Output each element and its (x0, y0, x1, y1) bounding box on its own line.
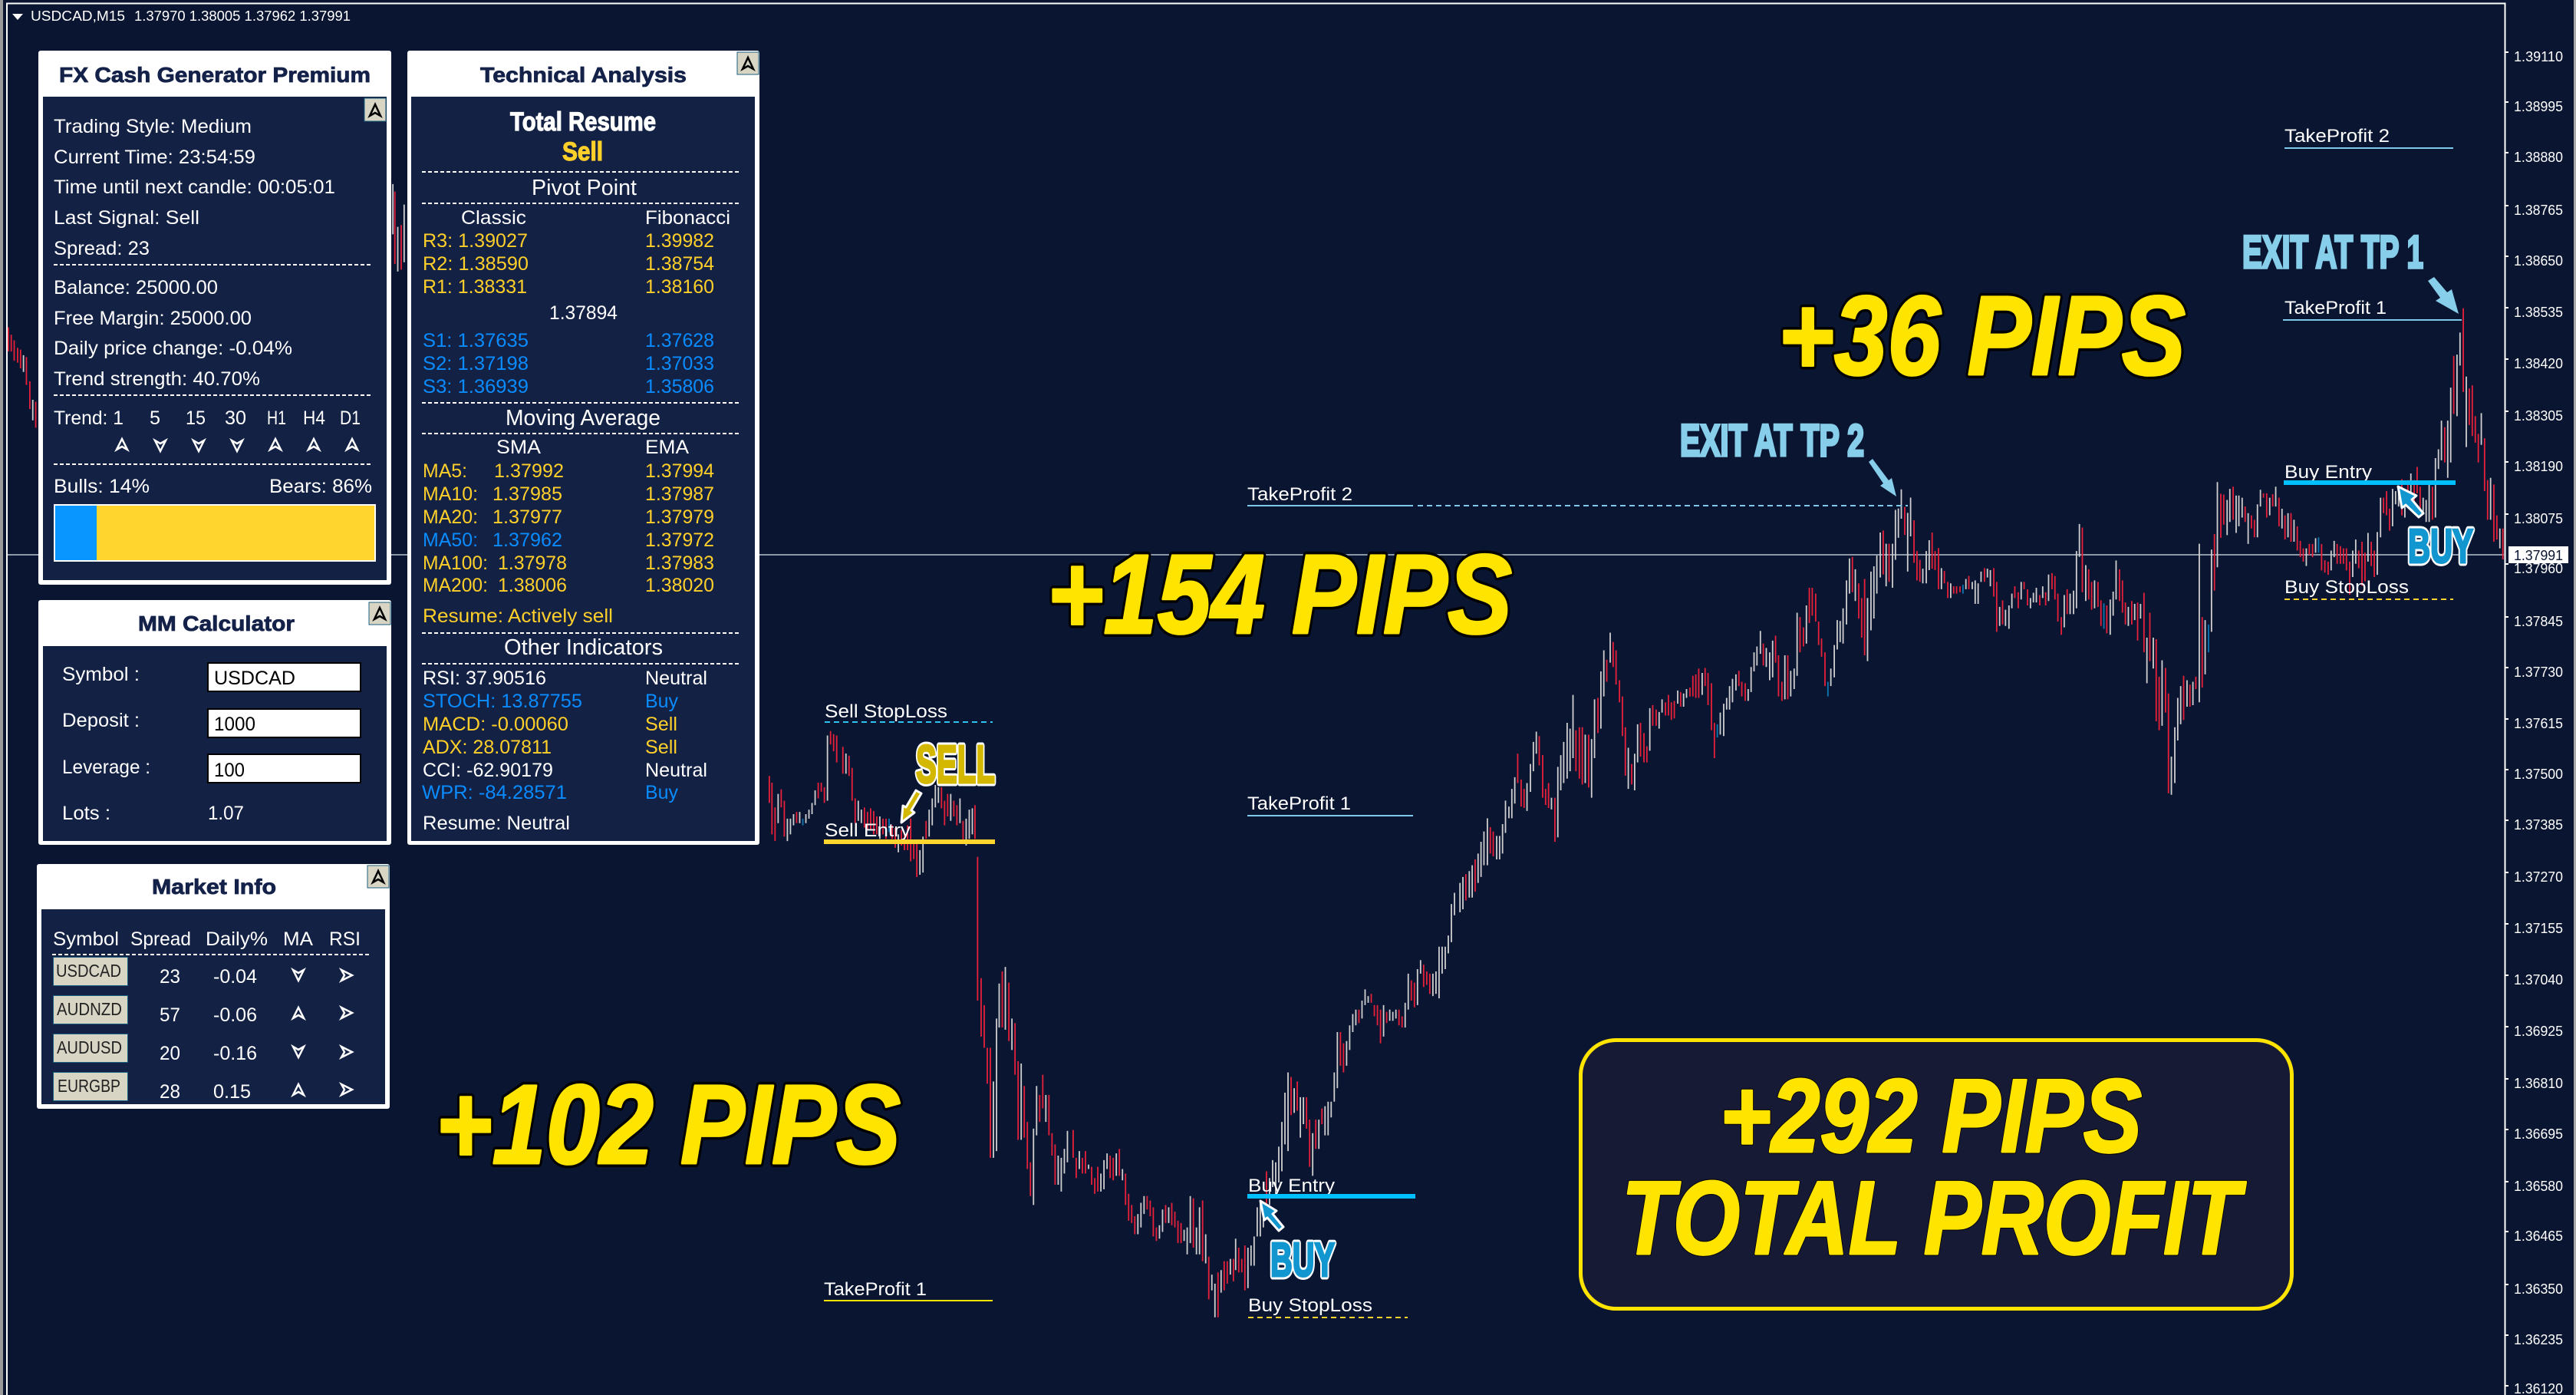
total profit callout: TOTAL PROFIT (1622, 1159, 2246, 1276)
moving average table: 1.38006 (498, 575, 567, 596)
collapse button (367, 866, 389, 888)
market table rows: 20 (160, 1043, 180, 1064)
calculator fields: 100 (214, 760, 245, 781)
+36 pips heading: +36 PIPS (1778, 273, 2186, 399)
market table rows: 23 (160, 966, 180, 988)
current price tag: 1.37991 (2514, 548, 2563, 563)
moving average table: MA100: (423, 552, 488, 574)
account info text: Free Margin: 25000.00 (54, 308, 252, 329)
price axis: 1.37500 (2514, 767, 2563, 782)
account info text (54, 116, 372, 395)
price axis: 1.38420 (2514, 356, 2563, 371)
other indicators table: CCI: -62.90179 (423, 760, 553, 781)
price axis: 1.36465 (2514, 1228, 2563, 1244)
price axis: 1.38995 (2514, 99, 2563, 114)
moving average table: 1.37978 (498, 552, 567, 574)
market table rows: 57 (160, 1004, 180, 1026)
other indicators table: Sell (645, 714, 677, 735)
price axis: 1.37845 (2514, 614, 2563, 629)
account info text: Trading Style: Medium (54, 116, 252, 137)
other indicators table: MACD: -0.00060 (423, 714, 568, 735)
pivot point table: 1.37894 (549, 302, 618, 324)
sell trade levels: Sell StopLoss (825, 701, 947, 722)
pivot point table: Classic (461, 207, 526, 229)
current price line (8, 554, 2505, 556)
calculator fields: Lots : (62, 803, 110, 824)
price axis: 1.36580 (2514, 1179, 2563, 1194)
chart header (12, 8, 351, 24)
price axis: 1.38535 (2514, 305, 2563, 320)
moving average table (423, 406, 714, 627)
price axis: 1.37155 (2514, 921, 2563, 936)
sell arrow (901, 790, 921, 823)
account info text: Trend strength: 40.70% (54, 368, 260, 390)
trend row: H1 (267, 407, 286, 429)
price axis: 1.36925 (2514, 1024, 2563, 1039)
panel title: Market Info (152, 875, 276, 899)
second buy trade levels: TakeProfit 1 (2284, 298, 2387, 318)
market table rows: -0.16 (213, 1043, 257, 1064)
first buy signal label: BUY (1270, 1234, 1335, 1287)
trend row: D1 (340, 407, 361, 429)
+102 pips heading: +102 PIPS (436, 1062, 901, 1188)
second buy signal label (2408, 520, 2473, 573)
sell signal label (916, 734, 995, 794)
moving average table: 1.38020 (645, 575, 714, 596)
total profit callout (1580, 1040, 2292, 1309)
pivot point table: R1: 1.38331 (423, 276, 527, 298)
panel: Technical Analysis (407, 51, 759, 845)
price axis: 1.36810 (2514, 1076, 2563, 1091)
second buy trade levels: TakeProfit 2 (2284, 126, 2390, 147)
total resume (510, 107, 656, 167)
sell trade levels: Sell Entry (825, 820, 911, 841)
pivot point table: 1.37628 (645, 330, 714, 351)
price axis (2505, 49, 2563, 1395)
panel title: MM Calculator (138, 612, 295, 635)
exit at TP 1 label: EXIT AT TP 1 (2242, 226, 2423, 278)
other indicators table (422, 635, 707, 834)
sell trade levels: TakeProfit 1 (824, 1279, 927, 1300)
trend row: 5 (150, 407, 160, 429)
panel title: Technical Analysis (480, 63, 687, 87)
first buy trade levels: Buy StopLoss (1248, 1295, 1372, 1316)
market table rows: -0.04 (213, 966, 257, 988)
price axis: 1.39110 (2514, 49, 2563, 64)
other indicators table: ADX: 28.07811 (423, 737, 552, 758)
other indicators table: STOCH: 13.87755 (423, 691, 582, 712)
first buy signal label (1270, 1234, 1335, 1287)
account info text: Balance: 25000.00 (54, 277, 218, 298)
price axis: 1.38075 (2514, 511, 2563, 526)
first buy arrow (1260, 1201, 1283, 1231)
other indicators table: Resume: Neutral (423, 813, 570, 834)
market table header (52, 928, 371, 955)
market table rows: USDCAD (56, 961, 121, 981)
pivot point table: Fibonacci (645, 207, 730, 229)
moving average table: MA50: (423, 529, 478, 551)
price axis: 1.37270 (2514, 869, 2563, 885)
pivot point table: 1.37033 (645, 353, 714, 374)
second buy signal label: BUY (2408, 520, 2473, 573)
calculator fields: 1000 (214, 714, 255, 735)
moving average table: 1.37994 (645, 460, 714, 482)
total profit callout: +292 PIPS (1720, 1057, 2142, 1174)
moving average table: 1.37972 (645, 529, 714, 551)
market table header: Spread (130, 928, 191, 950)
moving average table: 1.37979 (645, 506, 714, 528)
sell trade levels (824, 701, 995, 1301)
+102 pips heading: +102 PIPS (436, 1062, 901, 1188)
pivot point table: R2: 1.38590 (423, 253, 529, 275)
price axis: 1.37385 (2514, 817, 2563, 833)
pivot point table: 1.38754 (645, 253, 714, 275)
account info text: Last Signal: Sell (54, 207, 199, 229)
pivot point table: Pivot Point (532, 176, 637, 200)
total profit callout: TOTAL PROFIT (1622, 1159, 2246, 1276)
other indicators table: Neutral (645, 668, 707, 689)
+154 pips heading: +154 PIPS (1047, 532, 1512, 658)
sell signal label: SELL (916, 734, 995, 794)
+154 pips heading: +154 PIPS (1047, 532, 1512, 658)
market table rows: AUDUSD (57, 1037, 122, 1057)
panel title: FX Cash Generator Premium (59, 63, 371, 87)
other indicators table: WPR: -84.28571 (422, 782, 567, 803)
moving average table: 1.37983 (645, 552, 714, 574)
other indicators table: Buy (645, 782, 678, 803)
bulls and bears gauge: Bulls: 14% (54, 476, 150, 497)
first buy signal label: BUY (1270, 1234, 1335, 1287)
pivot point table: 1.39982 (645, 230, 714, 252)
calculator fields: 1.07 (208, 803, 244, 824)
trend row (54, 407, 372, 464)
first buy trade levels (1247, 484, 1908, 1318)
moving average table: 1.37962 (492, 529, 562, 551)
price axis: 1.38305 (2514, 408, 2563, 424)
price axis: 1.37960 (2514, 561, 2563, 576)
account info text: Time until next candle: 00:05:01 (54, 176, 335, 198)
calculator fields: Leverage : (62, 757, 150, 778)
moving average table: 1.37987 (645, 483, 714, 505)
market table rows: -0.06 (213, 1004, 257, 1026)
other indicators table: Sell (645, 737, 677, 758)
other indicators table: Other Indicators (504, 635, 663, 660)
price axis: 1.38190 (2514, 459, 2563, 474)
market table rows (54, 958, 352, 1103)
panel: FX Cash Generator Premium (38, 51, 391, 585)
other indicators table: RSI: 37.90516 (423, 668, 546, 689)
market table header: RSI (329, 928, 361, 950)
moving average table: MA20: (423, 506, 478, 528)
market table header: Daily% (206, 928, 268, 950)
bulls and bears gauge (54, 476, 375, 561)
pivot point table: R3: 1.39027 (423, 230, 528, 252)
calculator fields: Deposit : (62, 710, 140, 731)
first buy trade levels: TakeProfit 1 (1247, 793, 1351, 814)
account info text: Spread: 23 (54, 238, 150, 259)
arrow: exit at TP 1 (2428, 277, 2459, 314)
second buy trade levels (2283, 126, 2462, 599)
other indicators table: Neutral (645, 760, 707, 781)
first buy trade levels: Buy Entry (1248, 1176, 1335, 1196)
moving average table: MA10: (423, 483, 478, 505)
calculator fields: Symbol : (62, 664, 140, 685)
chart header: USDCAD,M15 (31, 8, 125, 24)
pivot point table: S3: 1.36939 (423, 376, 529, 397)
moving average table: 1.37977 (492, 506, 562, 528)
second buy trade levels: Buy Entry (2284, 462, 2372, 483)
second buy trade levels: Buy StopLoss (2284, 577, 2409, 598)
total resume: Total Resume (510, 107, 656, 137)
candlestick chart (8, 184, 2503, 1318)
calculator fields: USDCAD (214, 668, 295, 689)
calculator fields (62, 663, 361, 824)
trend row: Trend: 1 (54, 407, 124, 429)
pivot point table: 1.35806 (645, 376, 714, 397)
chart header: 1.37970 1.38005 1.37962 1.37991 (134, 8, 351, 24)
moving average table: 1.37985 (492, 483, 562, 505)
price axis: 1.37040 (2514, 972, 2563, 988)
second buy signal label: BUY (2408, 520, 2473, 573)
price axis: 1.38765 (2514, 203, 2563, 218)
panel: Market Info (37, 864, 390, 1109)
other indicators table: Buy (645, 691, 678, 712)
trend row: 30 (225, 407, 246, 429)
market table rows: 28 (160, 1081, 180, 1103)
moving average table: Resume: Actively sell (423, 605, 613, 627)
moving average table: 1.37992 (494, 460, 564, 482)
price axis: 1.36235 (2514, 1332, 2563, 1347)
arrow: exit at TP 2 (1869, 459, 1896, 496)
panel: MM Calculator (38, 600, 391, 845)
account info text: Current Time: 23:54:59 (54, 147, 255, 168)
collapse button (369, 602, 390, 625)
moving average table: MA5: (423, 460, 467, 482)
collapse button (364, 98, 386, 121)
moving average table: MA200: (423, 575, 488, 596)
price axis: 1.36695 (2514, 1126, 2563, 1142)
price axis: 1.36350 (2514, 1281, 2563, 1297)
market table rows: EURGBP (58, 1076, 120, 1096)
market table header: MA (283, 928, 313, 950)
total profit callout: +292 PIPS (1720, 1057, 2142, 1174)
second buy arrow (2398, 486, 2423, 517)
pivot point table: S2: 1.37198 (423, 353, 529, 374)
price axis: 1.38650 (2514, 253, 2563, 269)
moving average table: EMA (645, 437, 689, 458)
collapse button (737, 52, 759, 74)
pivot point table (423, 176, 730, 397)
total resume: Sell (562, 137, 603, 167)
market table rows: 0.15 (213, 1081, 251, 1103)
price axis: 1.37730 (2514, 665, 2563, 680)
pivot point table: S1: 1.37635 (423, 330, 529, 351)
trend row: H4 (303, 407, 325, 429)
+36 pips heading: +36 PIPS (1778, 273, 2186, 399)
bulls and bears gauge: Bears: 86% (269, 476, 372, 497)
trend row: 15 (186, 407, 206, 429)
price axis: 1.37615 (2514, 716, 2563, 731)
market table header: Symbol (53, 928, 119, 950)
account info text: Daily price change: -0.04% (54, 338, 292, 359)
price axis: 1.38880 (2514, 150, 2563, 165)
moving average table: SMA (496, 437, 541, 458)
exit at TP 2 label: EXIT AT TP 2 (1680, 416, 1864, 466)
moving average table: Moving Average (506, 406, 660, 430)
pivot point table: 1.38160 (645, 276, 714, 298)
first buy trade levels: TakeProfit 2 (1247, 484, 1352, 505)
sell signal label: SELL (916, 734, 995, 794)
market table rows: AUDNZD (57, 999, 122, 1019)
